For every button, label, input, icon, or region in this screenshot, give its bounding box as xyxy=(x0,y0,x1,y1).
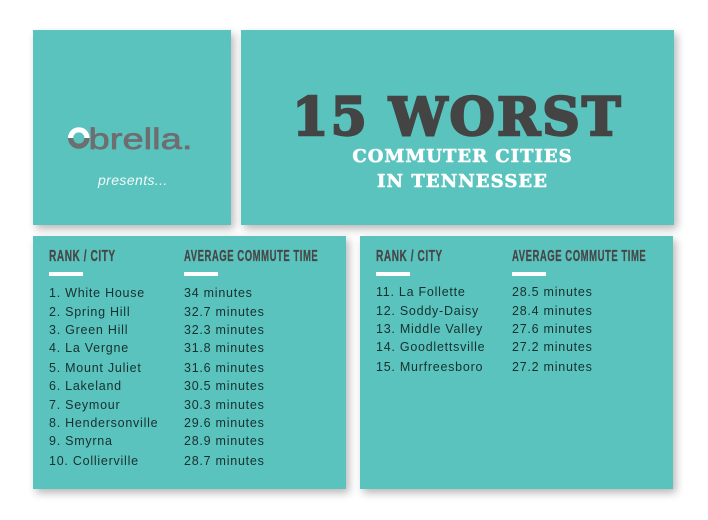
row 15: 27.2 minutes xyxy=(512,360,593,374)
row 13: 27.6 minutes xyxy=(512,322,593,336)
row 12: 12. Soddy-Daisy xyxy=(376,304,479,318)
row 7: 30.3 minutes xyxy=(184,398,265,412)
row 2 xyxy=(49,305,265,319)
row 3 xyxy=(49,323,265,337)
row 9 xyxy=(49,434,265,448)
logo: obrella xyxy=(68,123,192,156)
row 9: 28.9 minutes xyxy=(184,434,265,448)
row 3: 3. Green Hill xyxy=(49,323,128,337)
row 2: 2. Spring Hill xyxy=(49,305,130,319)
row 11 xyxy=(376,285,593,299)
row 11: 28.5 minutes xyxy=(512,285,593,299)
row 4: 4. La Vergne xyxy=(49,341,129,355)
row 1: 1. White House xyxy=(49,286,145,300)
row 8 xyxy=(49,416,265,430)
text: presents: presents... xyxy=(98,172,168,188)
row 1: 34 minutes xyxy=(184,286,253,300)
column header: average commute time: AVERAGE COMMUTE TIME xyxy=(184,248,318,265)
subheading: in tennessee: IN TENNESSEE xyxy=(377,171,548,192)
panel: ranks 1 to 10 xyxy=(33,236,346,489)
row 5: 31.6 minutes xyxy=(184,361,265,375)
row 12 xyxy=(376,304,593,318)
row 6: 6. Lakeland xyxy=(49,379,122,393)
row 14: 14. Goodlettsville xyxy=(376,340,485,354)
panel: title xyxy=(241,30,674,225)
panel: logo xyxy=(33,30,231,225)
column header: rank / city: RANK / CITY xyxy=(49,248,116,265)
row 6 xyxy=(49,379,265,393)
row 14 xyxy=(376,340,593,354)
row 9: 9. Smyrna xyxy=(49,434,113,448)
subheading: commuter cities: COMMUTER CITIES xyxy=(352,146,573,167)
row 13 xyxy=(376,322,593,336)
row 2: 32.7 minutes xyxy=(184,305,265,319)
logo: obrella: brella. xyxy=(88,123,192,156)
row 15: 15. Murfreesboro xyxy=(376,360,483,374)
heading: 15 worst: 15 WORST xyxy=(292,87,623,148)
row 12: 28.4 minutes xyxy=(512,304,593,318)
row 7: 7. Seymour xyxy=(49,398,120,412)
row 15 xyxy=(376,360,593,374)
row 4: 31.8 minutes xyxy=(184,341,265,355)
row 10 xyxy=(49,454,265,468)
row 7 xyxy=(49,398,265,412)
row 5 xyxy=(49,361,265,375)
row 6: 30.5 minutes xyxy=(184,379,265,393)
row 8: 8. Hendersonville xyxy=(49,416,158,430)
row 4 xyxy=(49,341,265,355)
column header: average commute time: AVERAGE COMMUTE TIME xyxy=(512,248,646,265)
row 10: 10. Collierville xyxy=(49,454,139,468)
row 5: 5. Mount Juliet xyxy=(49,361,142,375)
row 1 xyxy=(49,286,253,300)
row 11: 11. La Follette xyxy=(376,285,466,299)
row 8: 29.6 minutes xyxy=(184,416,265,430)
row 14: 27.2 minutes xyxy=(512,340,593,354)
column header: rank / city: RANK / CITY xyxy=(376,248,443,265)
row 13: 13. Middle Valley xyxy=(376,322,483,336)
panel: ranks 11 to 15 xyxy=(360,236,673,489)
row 3: 32.3 minutes xyxy=(184,323,265,337)
row 10: 28.7 minutes xyxy=(184,454,265,468)
